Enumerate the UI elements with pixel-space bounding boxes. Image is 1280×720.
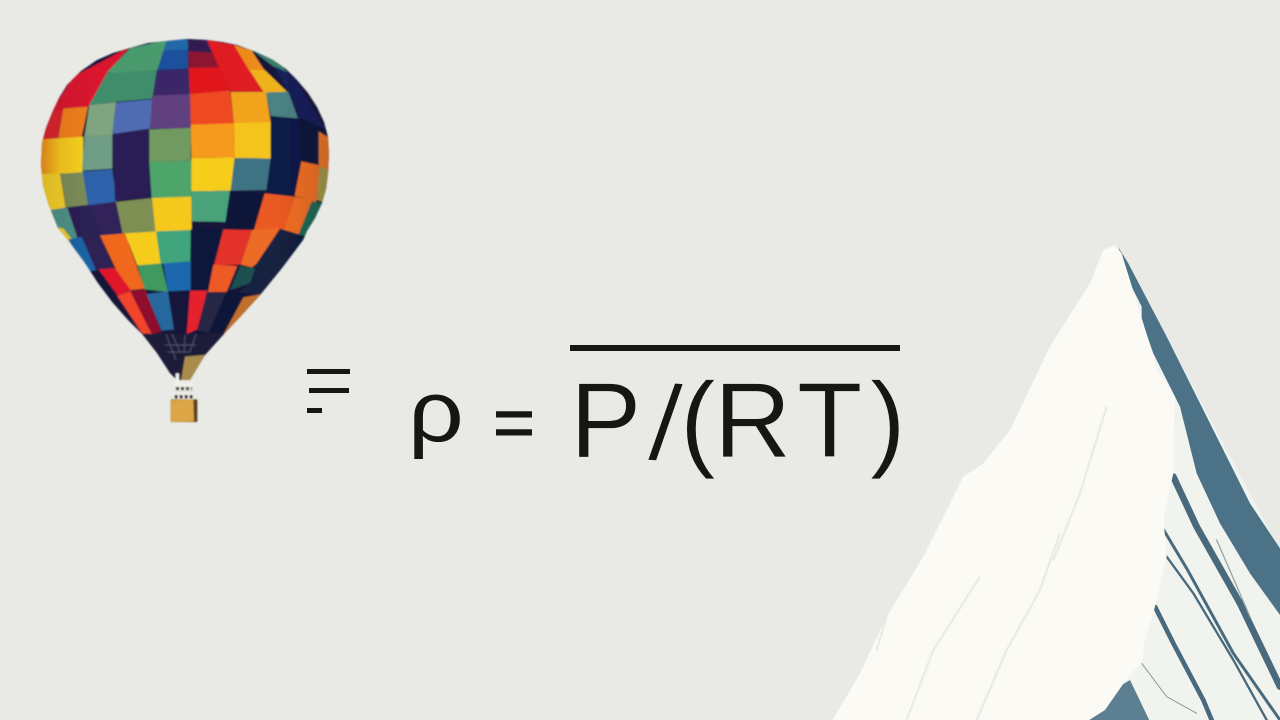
denominator: / <box>646 362 685 484</box>
hot air balloon <box>30 30 340 422</box>
denominator: R <box>714 360 791 480</box>
snow creases <box>877 407 1107 720</box>
formula <box>408 345 906 484</box>
denominator: ) <box>870 360 906 480</box>
shaded back face <box>1087 250 1280 720</box>
density symbol rho: ρ <box>408 364 464 460</box>
denominator: T <box>797 360 862 480</box>
dark streaks <box>1142 477 1280 720</box>
snowy mountain <box>832 245 1280 720</box>
denominator: ( <box>680 360 716 480</box>
blue ridge band <box>1118 247 1280 615</box>
equals sign: = <box>493 383 535 463</box>
small dash lines icon <box>307 369 350 413</box>
balloon envelope <box>40 38 330 381</box>
fraction bar <box>570 345 900 351</box>
white front face <box>832 245 1175 720</box>
basket and ropes <box>171 373 197 422</box>
blue shadow at base <box>1083 680 1150 720</box>
denominator: P <box>570 360 641 480</box>
